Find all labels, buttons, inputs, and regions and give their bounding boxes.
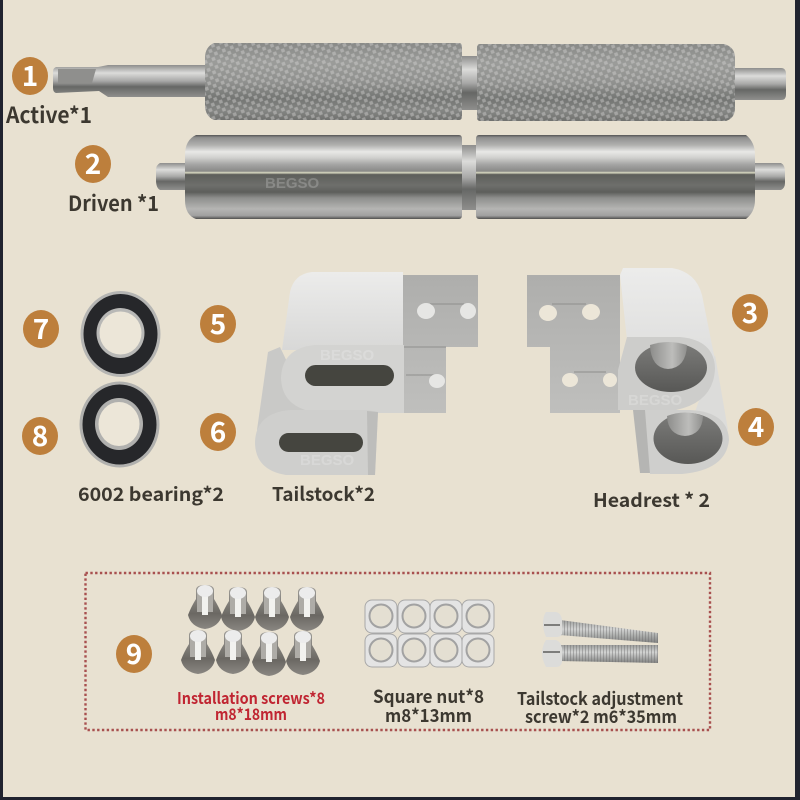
label: square nuts <box>373 683 484 728</box>
bearing 8 <box>80 382 160 468</box>
label: installation screws: Installation screws*8 <box>177 685 325 709</box>
badge 5: 5 <box>210 303 226 343</box>
icon: tailstock adjustment screws <box>542 612 658 667</box>
badge 4 <box>738 406 774 446</box>
tailstock part 5 and 6: BEGSO <box>300 452 355 469</box>
label: 6002 bearing*2: 6002 bearing*2 <box>78 480 224 507</box>
label: Headrest * 2: Headrest * 2 <box>593 486 710 513</box>
panel: hardware <box>86 573 710 730</box>
label: Tailstock*2: Tailstock*2 <box>272 480 375 507</box>
badge 7 <box>23 308 59 348</box>
headrest part 3 and 4 <box>527 268 729 474</box>
badge 2 <box>75 143 111 183</box>
badge 3 <box>732 292 768 332</box>
label: tailstock adjustment screws <box>517 686 684 729</box>
badge 6 <box>200 411 236 451</box>
icon: installation screws <box>181 585 324 676</box>
badge 5 <box>200 303 236 343</box>
badge 9: 9 <box>126 633 142 673</box>
label: installation screws <box>177 685 325 725</box>
tailstock part 5 and 6: BEGSO <box>320 347 375 364</box>
label: square nuts: m8*13mm <box>385 702 472 728</box>
badge 1 <box>12 55 48 95</box>
tailstock part 5 and 6 <box>255 272 478 475</box>
label: tailstock adjustment screws: Tailstock adjustment <box>517 686 684 711</box>
roller 1: active knurled roller <box>53 43 786 121</box>
badge 3: 3 <box>742 292 758 332</box>
badge 7: 7 <box>33 308 49 348</box>
label: Driven *1: Driven *1 <box>68 188 159 218</box>
badge 2: 2 <box>85 143 101 183</box>
label: Active*1: Active*1 <box>5 98 92 130</box>
label: tailstock adjustment screws: screw*2 m6*35mm <box>525 704 677 729</box>
badge 8 <box>22 415 58 455</box>
roller 2: driven smooth roller: BEGSO <box>265 175 320 192</box>
icon: square nuts <box>365 600 494 667</box>
bearing 7 <box>80 291 160 377</box>
label: square nuts: Square nut*8 <box>373 683 484 709</box>
badge 9 <box>116 633 152 673</box>
roller 2: driven smooth roller <box>156 135 785 219</box>
badge 6: 6 <box>210 411 226 451</box>
badge 8: 8 <box>32 415 48 455</box>
label: installation screws: m8*18mm <box>215 701 287 725</box>
badge 1: 1 <box>22 55 38 95</box>
badge 4: 4 <box>748 406 764 446</box>
headrest part 3 and 4: BEGSO <box>628 392 683 409</box>
